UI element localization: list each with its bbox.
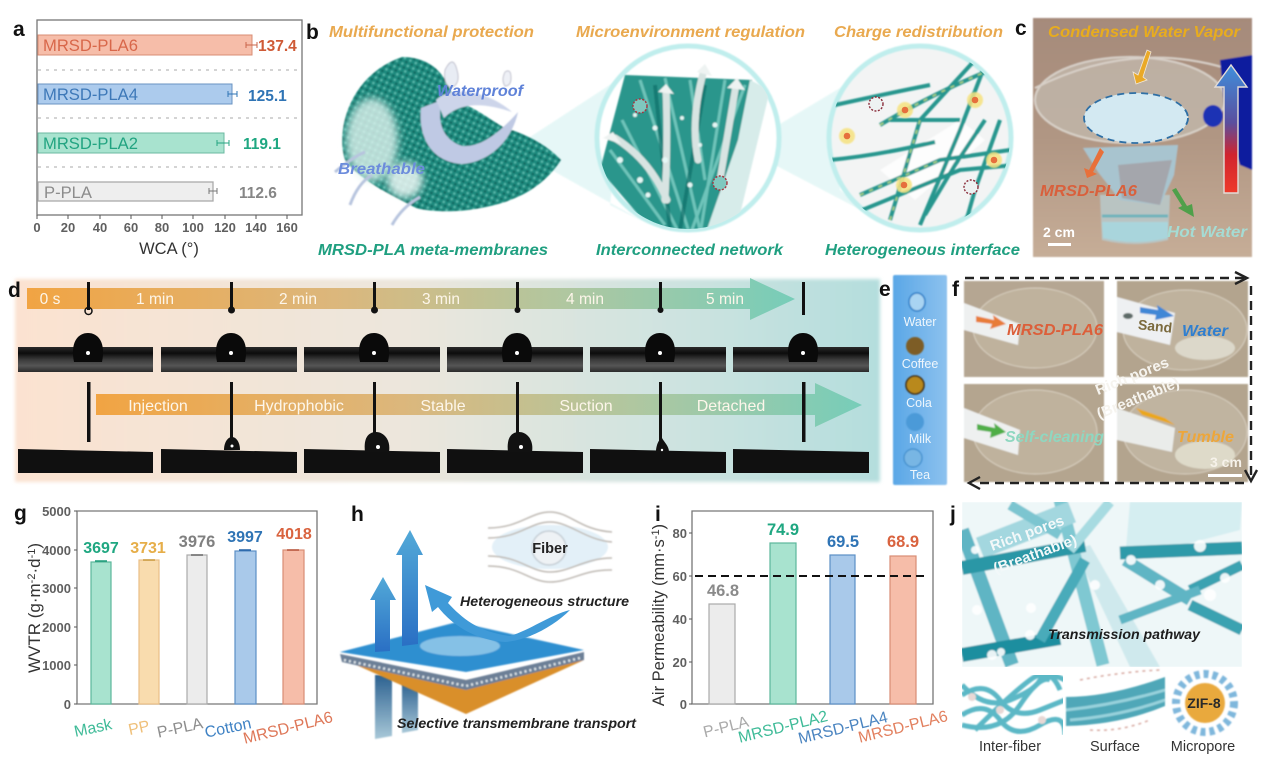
x labels: MRSD-PLA6 bbox=[242, 709, 335, 748]
liquid labels: Water bbox=[904, 315, 936, 329]
bar: Mask bbox=[83, 540, 119, 704]
bar: MRSD-PLA2: 74.9 bbox=[767, 521, 799, 539]
bar: MRSD-PLA6 bbox=[887, 533, 919, 704]
label: Tumble: Tumble bbox=[1177, 429, 1234, 446]
x labels: Mask bbox=[73, 716, 115, 741]
x labels: P-PLA bbox=[702, 714, 751, 741]
panel a: WCA bar chart bbox=[13, 18, 302, 258]
y axis: 20 bbox=[673, 655, 687, 670]
x labels: PP bbox=[127, 718, 151, 739]
x axis: 20 bbox=[61, 220, 75, 235]
label: Self-cleaning: Self-cleaning bbox=[1005, 429, 1104, 446]
label: Heterogeneous structure: Heterogeneous structure bbox=[460, 593, 629, 609]
panel label f: f bbox=[952, 278, 960, 301]
photo: top-left bbox=[964, 281, 1104, 377]
photo: bottom-right bbox=[1117, 384, 1248, 482]
panel label a: a bbox=[13, 18, 25, 41]
stage arrow bbox=[96, 383, 862, 427]
panel label e: e bbox=[879, 278, 891, 301]
time arrow: 2 min bbox=[279, 291, 317, 308]
dashed ellipse bbox=[1084, 93, 1188, 143]
panel label h: h bbox=[351, 503, 364, 526]
label: Transmission pathway: Transmission pathway bbox=[1048, 626, 1201, 642]
y axis: 4000 bbox=[42, 543, 71, 558]
panel e: liquid droplets on membrane bbox=[879, 275, 947, 485]
time arrow: 4 min bbox=[566, 291, 604, 308]
inset labels: Inter-fiber bbox=[979, 739, 1041, 755]
x labels bbox=[702, 708, 950, 748]
time arrow bbox=[27, 278, 795, 320]
label: MRSD-PLA meta-membranes: MRSD-PLA meta-membranes bbox=[318, 242, 548, 259]
y axis: 60 bbox=[673, 569, 687, 584]
panel j: transmission pathway bbox=[949, 500, 1242, 755]
blue strip bbox=[893, 275, 947, 485]
inset labels: Micropore bbox=[1171, 739, 1235, 755]
stage arrow: Hydrophobic bbox=[254, 398, 344, 415]
label: rich pores: (Breathable) bbox=[991, 532, 1079, 577]
x axis bbox=[33, 215, 298, 258]
time arrow: 3 min bbox=[422, 291, 460, 308]
rich pores text: (Breathable) bbox=[1094, 374, 1182, 423]
panel label j: j bbox=[949, 503, 956, 526]
y axis: 2000 bbox=[42, 620, 71, 635]
panel label d: d bbox=[8, 279, 21, 302]
y axis bbox=[650, 524, 692, 712]
plot frame bbox=[692, 511, 933, 704]
bar: MRSD-PLA6: 68.9 bbox=[887, 533, 919, 551]
liquid labels bbox=[902, 315, 938, 482]
panel d: droplet time series bbox=[8, 278, 880, 482]
bar: MRSD-PLA4: MRSD-PLA4 bbox=[43, 85, 138, 104]
fiber network image bbox=[962, 500, 1242, 667]
bar: MRSD-PLA6: 137.4 bbox=[258, 38, 297, 55]
panel b: membrane illustration bbox=[306, 21, 1020, 259]
inset: surface bbox=[1066, 670, 1165, 730]
label: Hot Water: Hot Water bbox=[1167, 224, 1248, 241]
inset: inter-fiber bbox=[962, 674, 1065, 735]
y axis: 80 bbox=[673, 526, 687, 541]
stage arrow: Detached bbox=[697, 398, 765, 415]
bar: Cotton bbox=[227, 529, 263, 704]
droplets bbox=[904, 293, 925, 467]
panel f: washing sequence photos bbox=[952, 272, 1257, 489]
heading: Charge redistribution: Charge redistribution bbox=[834, 24, 1003, 41]
label: rich pores: Rich pores bbox=[988, 512, 1067, 555]
heading: Microenvironment regulation: Microenvironment regulation bbox=[576, 24, 805, 41]
y axis: 0 bbox=[680, 697, 687, 712]
label: MRSD-PLA6: MRSD-PLA6 bbox=[1040, 183, 1137, 200]
y axis: ·d bbox=[25, 558, 44, 574]
panel g: WVTR bar chart bbox=[14, 502, 335, 748]
bar: MRSD-PLA6: MRSD-PLA6 bbox=[43, 36, 138, 55]
photo bbox=[1033, 18, 1252, 257]
strips row 2 with needles and droplets bbox=[18, 382, 869, 473]
curved arrow bbox=[425, 585, 570, 642]
scale bar: 3 cm bbox=[1210, 454, 1242, 470]
bar: Mask: 3697 bbox=[83, 540, 119, 557]
inset: micropore ZIF-8 bbox=[1176, 674, 1234, 732]
time arrow: 1 min bbox=[136, 291, 174, 308]
panel c: condensation photo bbox=[1015, 17, 1252, 257]
bar: P-PLA: 3976 bbox=[179, 533, 215, 551]
magnified circle: heterogeneous interface bbox=[829, 46, 1015, 230]
labels: MRSD-PLA6 bbox=[1007, 322, 1103, 339]
label: Waterproof: Waterproof bbox=[437, 83, 525, 100]
y axis: ) bbox=[25, 543, 44, 549]
strips row 1 with droplets bbox=[18, 333, 869, 372]
panel label i: i bbox=[655, 503, 661, 526]
scale bar bbox=[1208, 454, 1242, 477]
bar: P-PLA bbox=[707, 582, 739, 704]
panel label g: g bbox=[14, 502, 27, 525]
bar: MRSD-PLA6 bbox=[276, 526, 312, 704]
x labels bbox=[73, 709, 335, 748]
y axis: 1000 bbox=[42, 658, 71, 673]
photo: top-right bbox=[1117, 281, 1248, 377]
label: Interconnected network: Interconnected network bbox=[596, 242, 784, 259]
bar: MRSD-PLA2 bbox=[38, 133, 281, 153]
x axis: 120 bbox=[214, 220, 236, 235]
panel label b: b bbox=[306, 21, 319, 44]
scale bar: 2 cm bbox=[1043, 224, 1075, 240]
panel h: membrane transport diagram bbox=[340, 503, 637, 739]
bar: P-PLA: P-PLA bbox=[44, 183, 93, 202]
connector beams bbox=[530, 75, 880, 225]
label: Water: Water bbox=[1182, 323, 1229, 340]
label: Selective transmembrane transport: Selective transmembrane transport bbox=[397, 715, 637, 731]
plot frame bbox=[37, 20, 302, 215]
bar: P-PLA bbox=[38, 182, 277, 202]
label: rich pores bbox=[988, 512, 1079, 577]
label: Condensed Water Vapor: Condensed Water Vapor bbox=[1048, 24, 1241, 41]
rich pores text: Rich pores bbox=[1093, 354, 1171, 399]
photo: bottom-left bbox=[964, 384, 1104, 482]
panel label c: c bbox=[1015, 17, 1027, 40]
threshold line bbox=[695, 575, 929, 577]
y axis: -2 bbox=[26, 574, 38, 583]
time arrow: 5 min bbox=[706, 291, 744, 308]
time arrow: 0 s bbox=[40, 291, 61, 308]
y axis: -1 bbox=[650, 529, 662, 539]
bar: MRSD-PLA2: MRSD-PLA2 bbox=[43, 134, 138, 153]
background bbox=[15, 279, 880, 482]
y axis: 3000 bbox=[42, 581, 71, 596]
membrane blob bbox=[335, 57, 561, 225]
y axis: ) bbox=[650, 524, 668, 529]
x axis: 40 bbox=[93, 220, 107, 235]
x axis: 140 bbox=[245, 220, 267, 235]
gradient arrow bbox=[1215, 65, 1247, 193]
x axis: WCA (°) bbox=[139, 240, 199, 258]
label: Breathable: Breathable bbox=[338, 161, 425, 178]
magnified circle: interconnected network bbox=[597, 46, 779, 240]
x labels: MRSD-PLA6 bbox=[857, 708, 950, 747]
bar: MRSD-PLA4: 69.5 bbox=[827, 533, 859, 551]
inset labels bbox=[979, 739, 1235, 755]
y axis: 40 bbox=[673, 612, 687, 627]
label: Heterogeneous interface: Heterogeneous interface bbox=[825, 242, 1020, 259]
x axis: 60 bbox=[124, 220, 138, 235]
bar: MRSD-PLA4 bbox=[38, 84, 287, 105]
liquid labels: Tea bbox=[910, 468, 930, 482]
inset labels: Surface bbox=[1090, 739, 1140, 755]
bar: P-PLA bbox=[179, 533, 215, 704]
bar: P-PLA: 112.6 bbox=[239, 185, 277, 202]
liquid labels: Milk bbox=[909, 432, 932, 446]
stage arrow: Stable bbox=[420, 398, 466, 415]
y axis bbox=[25, 504, 77, 712]
up arrows bbox=[370, 530, 423, 652]
bar: Cotton: 3997 bbox=[227, 529, 263, 546]
dashed flow arrows bbox=[965, 272, 1257, 489]
arrows bbox=[1133, 50, 1151, 84]
stage arrow: Suction bbox=[559, 398, 613, 415]
bar: MRSD-PLA6 bbox=[38, 35, 297, 55]
label: Sand: Sand bbox=[1137, 316, 1173, 336]
stage arrow: Injection bbox=[128, 398, 188, 415]
x axis: 80 bbox=[155, 220, 169, 235]
bar: PP bbox=[130, 540, 166, 704]
liquid labels: Cola bbox=[906, 396, 932, 410]
label: Fiber: Fiber bbox=[532, 541, 568, 557]
x axis: 160 bbox=[276, 220, 298, 235]
inset: micropore ZIF-8: ZIF-8 bbox=[1187, 695, 1221, 711]
y axis: -1 bbox=[26, 549, 38, 558]
bar: MRSD-PLA4: 125.1 bbox=[248, 88, 287, 105]
y axis: 5000 bbox=[42, 504, 71, 519]
bar: P-PLA: 46.8 bbox=[707, 582, 739, 600]
plot frame bbox=[77, 511, 317, 704]
bar: MRSD-PLA2: 119.1 bbox=[243, 136, 281, 153]
x axis: 0 bbox=[33, 220, 41, 235]
bar: MRSD-PLA4 bbox=[827, 533, 859, 704]
y axis: WVTR (g·m bbox=[25, 583, 44, 673]
y axis: Air Permeability (mm·s bbox=[650, 539, 668, 706]
rich pores text bbox=[1093, 354, 1182, 423]
bar: MRSD-PLA2 bbox=[767, 521, 799, 704]
x labels: MRSD-PLA4 bbox=[797, 709, 890, 748]
bar: PP: 3731 bbox=[130, 540, 166, 557]
lower stems bbox=[375, 675, 418, 739]
membrane layers bbox=[340, 622, 584, 714]
x labels: P-PLA bbox=[156, 715, 205, 742]
bar: MRSD-PLA6: 4018 bbox=[276, 526, 312, 543]
x labels: MRSD-PLA2 bbox=[737, 708, 830, 747]
fiber inset bbox=[488, 512, 612, 582]
needles row 1 bbox=[85, 282, 805, 315]
panel i: air permeability bar chart bbox=[650, 503, 950, 748]
liquid labels: Coffee bbox=[902, 357, 938, 371]
x labels: Cotton bbox=[203, 715, 253, 742]
x axis: 100 bbox=[182, 220, 204, 235]
y axis: 0 bbox=[64, 697, 71, 712]
heading: Multifunctional protection: Multifunctional protection bbox=[329, 24, 534, 41]
